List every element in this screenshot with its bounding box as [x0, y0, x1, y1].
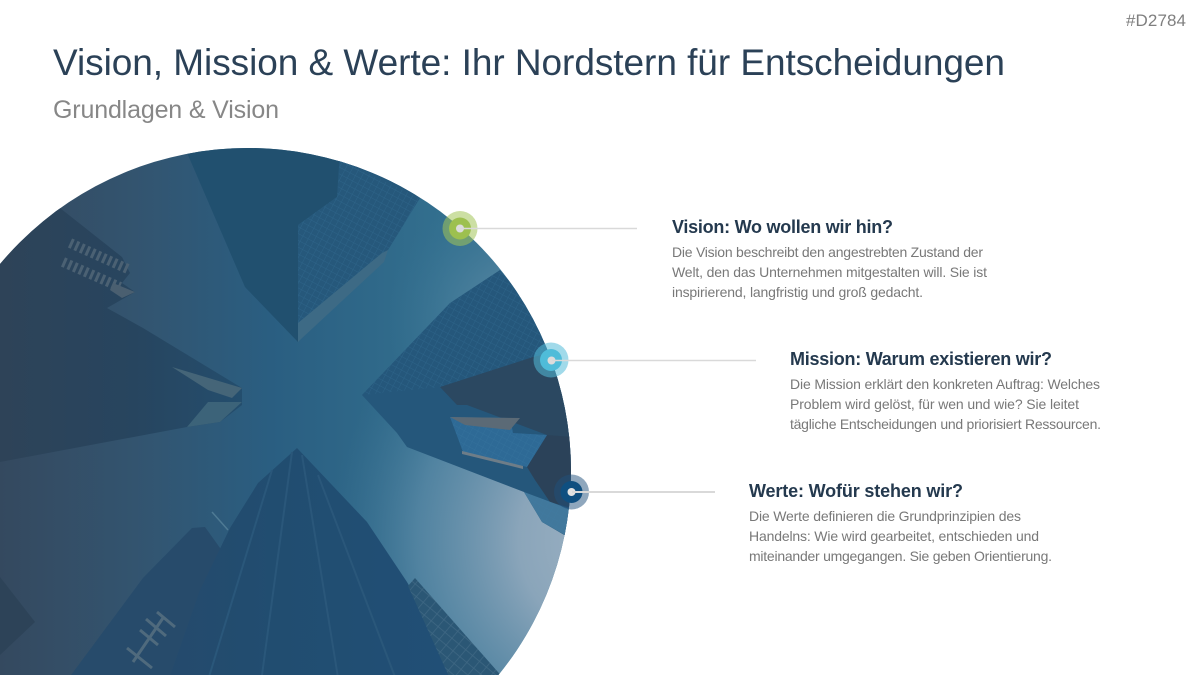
body text [790, 376, 1101, 432]
bottom left dark corner [10, 590, 34, 646]
right glass building [362, 270, 585, 536]
title: Vision, Mission & Werte: Ihr Nordstern für Entscheidungen [53, 42, 1005, 83]
body text: tägliche Entscheidungen und priorisiert Ressourcen. [790, 416, 1101, 432]
body text: Die Vision beschreibt den angestrebten Zustand der [672, 244, 983, 260]
callout: mission [534, 342, 1101, 432]
body text: Handelns: Wie wird gearbeitet, entschieden und [749, 528, 1039, 544]
connector line [552, 360, 756, 362]
central lower tower [208, 448, 448, 675]
body text: Problem wird gelöst, für wen und wie? Sie leitet [790, 396, 1079, 412]
icon: navy target marker [554, 474, 589, 510]
icon: green target marker [442, 211, 478, 246]
body text: miteinander umgegangen. Sie geben Orientierung. [749, 548, 1052, 564]
upper left dark building [0, 208, 242, 462]
circular skyline photo [0, 140, 590, 675]
lower left building [72, 512, 228, 675]
heading: Vision: Wo wollen wir hin? [672, 217, 893, 237]
body text: Die Mission erklärt den konkreten Auftrag: Welches [790, 376, 1100, 392]
icon: blue target marker [534, 342, 568, 378]
connector line [460, 228, 637, 230]
heading: Mission: Warum existieren wir? [790, 349, 1052, 369]
callout: values [554, 474, 1052, 564]
slide id: #D2784 [1126, 11, 1186, 30]
callout: vision [442, 211, 987, 300]
top centre building [185, 148, 420, 342]
heading: Werte: Wofür stehen wir? [749, 481, 963, 501]
body text [749, 508, 1052, 564]
lower right building [408, 578, 505, 675]
body text: Welt, den das Unternehmen mitgestalten will. Sie ist [672, 264, 987, 280]
body text: Die Werte definieren die Grundprinzipien des [749, 508, 1021, 524]
body text: inspirierend, langfristig und groß gedacht. [672, 284, 923, 300]
body text [672, 244, 987, 300]
subtitle: Grundlagen & Vision [53, 96, 279, 124]
connector line [572, 491, 715, 493]
